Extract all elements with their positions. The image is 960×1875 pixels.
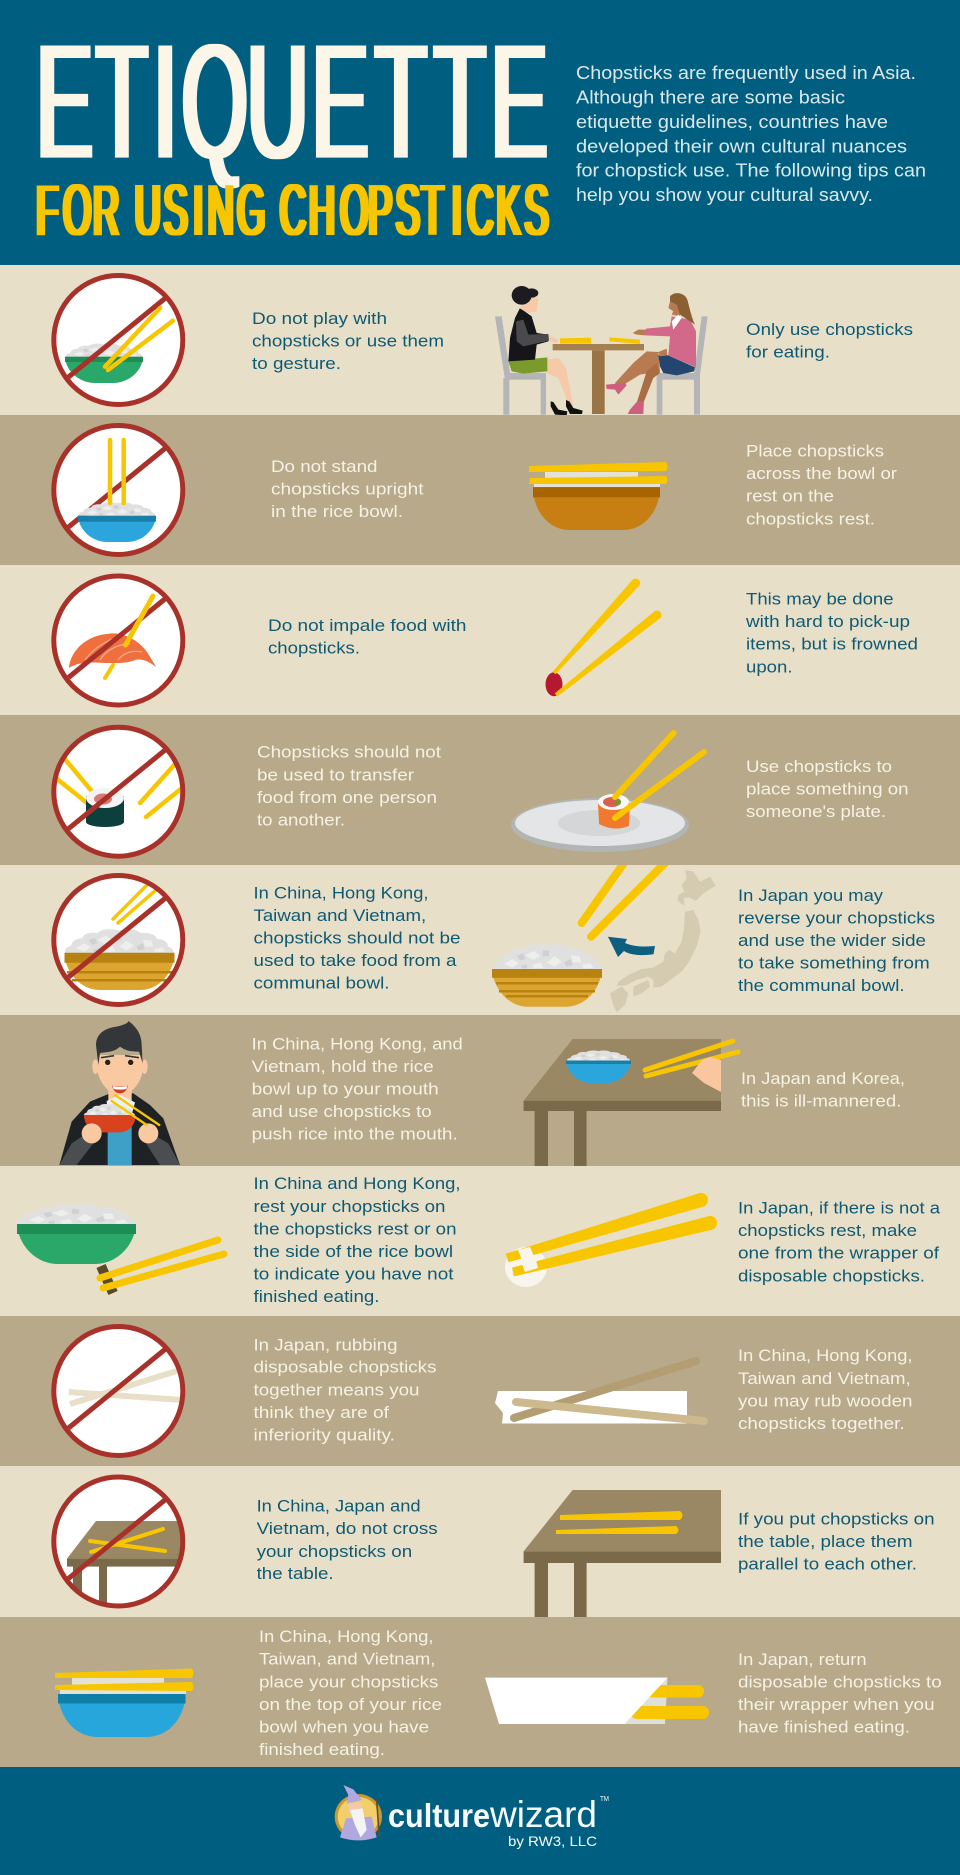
text: hold rice bowl: push rice into the mouth. — [252, 1125, 458, 1144]
text: return to wrapper: their wrapper when you — [738, 1695, 935, 1714]
text: place chopsticks: across the bowl or — [746, 464, 897, 483]
logo wordmark — [388, 1794, 609, 1849]
panel: row 2 upright in rice — [0, 415, 960, 565]
text: place chopsticks: rest on the — [746, 487, 834, 506]
text: rest chopsticks: to indicate you have not — [254, 1265, 454, 1284]
text: make rest from wrapper — [738, 1198, 941, 1285]
text: hold rice bowl: and use chopsticks to — [252, 1102, 432, 1121]
text: communal bowl warning: communal bowl. — [254, 974, 390, 993]
text: do not impale: Do not impale food with — [268, 616, 466, 635]
subtitle: for using chopsticks: FOR USING CHOPSTICKS — [36, 170, 549, 251]
text: reverse chopsticks in Japan: the communal bowl. — [738, 976, 905, 995]
illustration: wooden chopsticks on wrapper — [495, 1361, 704, 1424]
text: hold rice bowl: Vietnam, hold the rice — [252, 1057, 434, 1076]
illustration: chopsticks on paper rest — [505, 1193, 717, 1287]
text: may rub wooden — [738, 1346, 912, 1433]
text: return to wrapper — [738, 1650, 942, 1736]
footer panel — [0, 1767, 960, 1875]
panel: row 9 crossing — [0, 1466, 960, 1617]
text: make rest from wrapper: one from the wrapper of — [738, 1244, 939, 1263]
illustration: chopsticks on blue bowl — [55, 1668, 194, 1737]
text: return to wrapper: In Japan, return — [738, 1650, 867, 1669]
intro text: Although there are some basic — [576, 86, 845, 107]
text: hold rice bowl: In China, Hong Kong, and — [252, 1034, 463, 1053]
illustration: bowl on table and hand — [524, 1039, 738, 1166]
text: may be done — [745, 589, 918, 676]
text: may be done: upon. — [746, 657, 792, 676]
text: do not stand: in the rice bowl. — [271, 502, 403, 521]
header panel — [0, 0, 960, 265]
text: may be done: This may be done — [746, 589, 894, 608]
text: place chopsticks: Place chopsticks — [746, 442, 884, 461]
text: top of rice bowl: on the top of your rice — [259, 1695, 442, 1714]
illustration: sushi on plate — [511, 733, 704, 852]
illustration: two women at a table — [495, 286, 708, 415]
intro text — [576, 62, 926, 205]
illustration: parallel chopsticks on table — [524, 1490, 721, 1617]
text: rest chopsticks: finished eating. — [254, 1287, 380, 1306]
logo wordmark: TM — [600, 1796, 609, 1803]
intro text: etiquette guidelines, countries have — [576, 111, 888, 132]
text: do not play: Do not play with — [252, 309, 387, 328]
text: hold rice bowl: bowl up to your mouth — [252, 1080, 439, 1099]
text: reverse chopsticks in Japan: to take something from — [738, 954, 930, 973]
text: top of rice bowl — [259, 1627, 442, 1759]
panel: row 1 play or gesture — [0, 265, 960, 415]
icon: prohibited impaled salmon — [54, 576, 183, 705]
panel: row 8 rubbing — [0, 1316, 960, 1466]
text: reverse chopsticks in Japan: In Japan you may — [738, 886, 884, 905]
text: only use chopsticks — [746, 320, 913, 362]
logo wordmark: wizard — [489, 1794, 597, 1835]
text: chopsticks should not transfer: to another. — [257, 811, 345, 830]
text: top of rice bowl: Taiwan, and Vietnam, — [259, 1650, 435, 1669]
text: top of rice bowl: place your chopsticks — [259, 1672, 438, 1691]
text: chopsticks should not transfer: be used to transfer — [257, 765, 414, 784]
text: may rub wooden: Taiwan and Vietnam, — [738, 1369, 911, 1388]
intro text: Chopsticks are frequently used in Asia. — [576, 62, 916, 83]
text: may rub wooden: In China, Hong Kong, — [738, 1346, 912, 1365]
text: rest chopsticks: In China and Hong Kong, — [254, 1174, 460, 1193]
text: top of rice bowl: In China, Hong Kong, — [259, 1627, 434, 1646]
text: place parallel: the table, place them — [738, 1532, 912, 1551]
text: only use chopsticks: Only use chopsticks — [746, 320, 913, 339]
text: place parallel — [738, 1509, 935, 1574]
text: ill-mannered: this is ill-mannered. — [741, 1092, 901, 1111]
text: do not cross: Vietnam, do not cross — [257, 1519, 438, 1538]
panel: row 6 bowl to mouth — [0, 1015, 960, 1166]
icon: prohibited crossed chopsticks — [54, 1477, 190, 1606]
panel: row 3 impale — [0, 565, 960, 715]
text: rubbing in Japan: think they are of — [254, 1403, 389, 1422]
text: communal bowl warning — [254, 883, 460, 993]
illustration: chopsticks in wrapper — [485, 1678, 709, 1724]
text: communal bowl warning: In China, Hong Kong, — [254, 883, 428, 902]
text: rubbing in Japan: inferiority quality. — [254, 1426, 395, 1444]
text: place parallel: parallel to each other. — [738, 1554, 917, 1574]
text: may rub wooden: chopsticks together. — [738, 1414, 905, 1433]
text: use chopsticks to place: Use chopsticks to — [746, 757, 892, 776]
text: make rest from wrapper: disposable chopsticks. — [738, 1266, 925, 1285]
text: chopsticks should not transfer: food from one person — [257, 788, 437, 807]
text: make rest from wrapper: chopsticks rest, make — [738, 1221, 917, 1240]
intro text: developed their own cultural nuances — [576, 135, 907, 156]
text: make rest from wrapper: In Japan, if there is not a — [738, 1198, 941, 1217]
text: only use chopsticks: for eating. — [746, 343, 830, 362]
text: communal bowl warning: chopsticks should not be — [254, 929, 460, 948]
text: do not cross — [257, 1496, 438, 1583]
text: rest chopsticks: the chopsticks rest or on — [254, 1219, 456, 1238]
panel: row 4 transfer food — [0, 715, 960, 865]
text: place parallel: If you put chopsticks on — [738, 1509, 935, 1528]
logo wordmark: by RW3, LLC — [508, 1833, 597, 1849]
text: return to wrapper: disposable chopsticks to — [738, 1672, 942, 1691]
text: rubbing in Japan — [254, 1335, 436, 1444]
text: do not cross: In China, Japan and — [257, 1496, 421, 1515]
text: use chopsticks to place — [746, 757, 909, 821]
icon: prohibited rubbing chopsticks — [54, 1326, 183, 1456]
text: do not play — [252, 309, 444, 373]
text: may be done: items, but is frowned — [746, 635, 918, 654]
text: place chopsticks — [746, 442, 897, 528]
text: communal bowl warning: used to take food from a — [254, 951, 457, 970]
icon: prohibited green bowl — [54, 276, 183, 404]
text: do not cross: the table. — [257, 1564, 334, 1583]
arrow: curved toward bowl — [608, 937, 655, 957]
icon: prohibited communal bowl — [54, 876, 183, 1004]
illustration: reversed chopsticks over bowl — [492, 858, 670, 1007]
panel: row 10 finished eating — [0, 1617, 960, 1767]
illustration: man eating from bowl — [59, 1021, 180, 1165]
text: ill-mannered: In Japan and Korea, — [741, 1069, 905, 1088]
text: hold rice bowl — [252, 1034, 463, 1144]
text: do not impale: chopsticks. — [268, 639, 360, 658]
text: reverse chopsticks in Japan: and use the wider side — [738, 931, 926, 950]
text: reverse chopsticks in Japan — [738, 886, 935, 995]
text: do not stand: chopsticks upright — [271, 480, 424, 499]
text: use chopsticks to place: someone's plate. — [746, 802, 886, 821]
text: place chopsticks: chopsticks rest. — [746, 509, 875, 528]
text: top of rice bowl: bowl when you have — [259, 1717, 429, 1736]
text: rubbing in Japan: In Japan, rubbing — [254, 1335, 398, 1354]
text: use chopsticks to place: place something on — [746, 780, 909, 799]
illustration: chopsticks across brown bowl — [529, 462, 668, 530]
text: do not impale — [268, 616, 466, 658]
text: chopsticks should not transfer — [257, 743, 441, 830]
illustration: green bowl with chopstick rest — [17, 1204, 224, 1293]
text: do not play: to gesture. — [252, 354, 341, 373]
intro text: for chopstick use. The following tips can — [576, 160, 926, 181]
text: rest chopsticks: the side of the rice bowl — [254, 1242, 453, 1261]
panel: row 7 chopsticks rest — [0, 1166, 960, 1316]
text: may rub wooden: you may rub wooden — [738, 1392, 912, 1411]
logo wordmark: culture — [388, 1797, 490, 1834]
text: rubbing in Japan: together means you — [254, 1380, 420, 1399]
text: rest chopsticks: rest your chopsticks on — [254, 1197, 446, 1216]
text: do not stand: Do not stand — [271, 457, 378, 476]
intro text: help you show your cultural savvy. — [576, 184, 873, 205]
text: top of rice bowl: finished eating. — [259, 1740, 385, 1759]
text: communal bowl warning: Taiwan and Vietnam, — [254, 906, 426, 925]
map: Japan silhouette — [610, 870, 716, 1012]
text: chopsticks should not transfer: Chopsticks should not — [257, 743, 441, 762]
text: do not play: chopsticks or use them — [252, 332, 444, 351]
text: rest chopsticks — [254, 1174, 460, 1306]
panel: row 5 communal bowl — [0, 858, 960, 1015]
text: do not stand — [271, 457, 424, 521]
text: reverse chopsticks in Japan: reverse your chopsticks — [738, 909, 935, 928]
text: ill-mannered — [741, 1069, 905, 1111]
text: may be done: with hard to pick-up — [745, 612, 910, 631]
text: rubbing in Japan: disposable chopsticks — [254, 1358, 436, 1377]
illustration: chopsticks holding bean — [546, 578, 662, 697]
text: return to wrapper: have finished eating. — [738, 1717, 910, 1736]
icon: wizard logo — [335, 1785, 382, 1840]
text: do not cross: your chopsticks on — [257, 1542, 412, 1561]
title: ETIQUETTE: ETIQUETTE — [36, 10, 548, 193]
icon: prohibited sushi transfer — [54, 727, 183, 856]
icon: prohibited upright chopsticks — [54, 426, 183, 554]
